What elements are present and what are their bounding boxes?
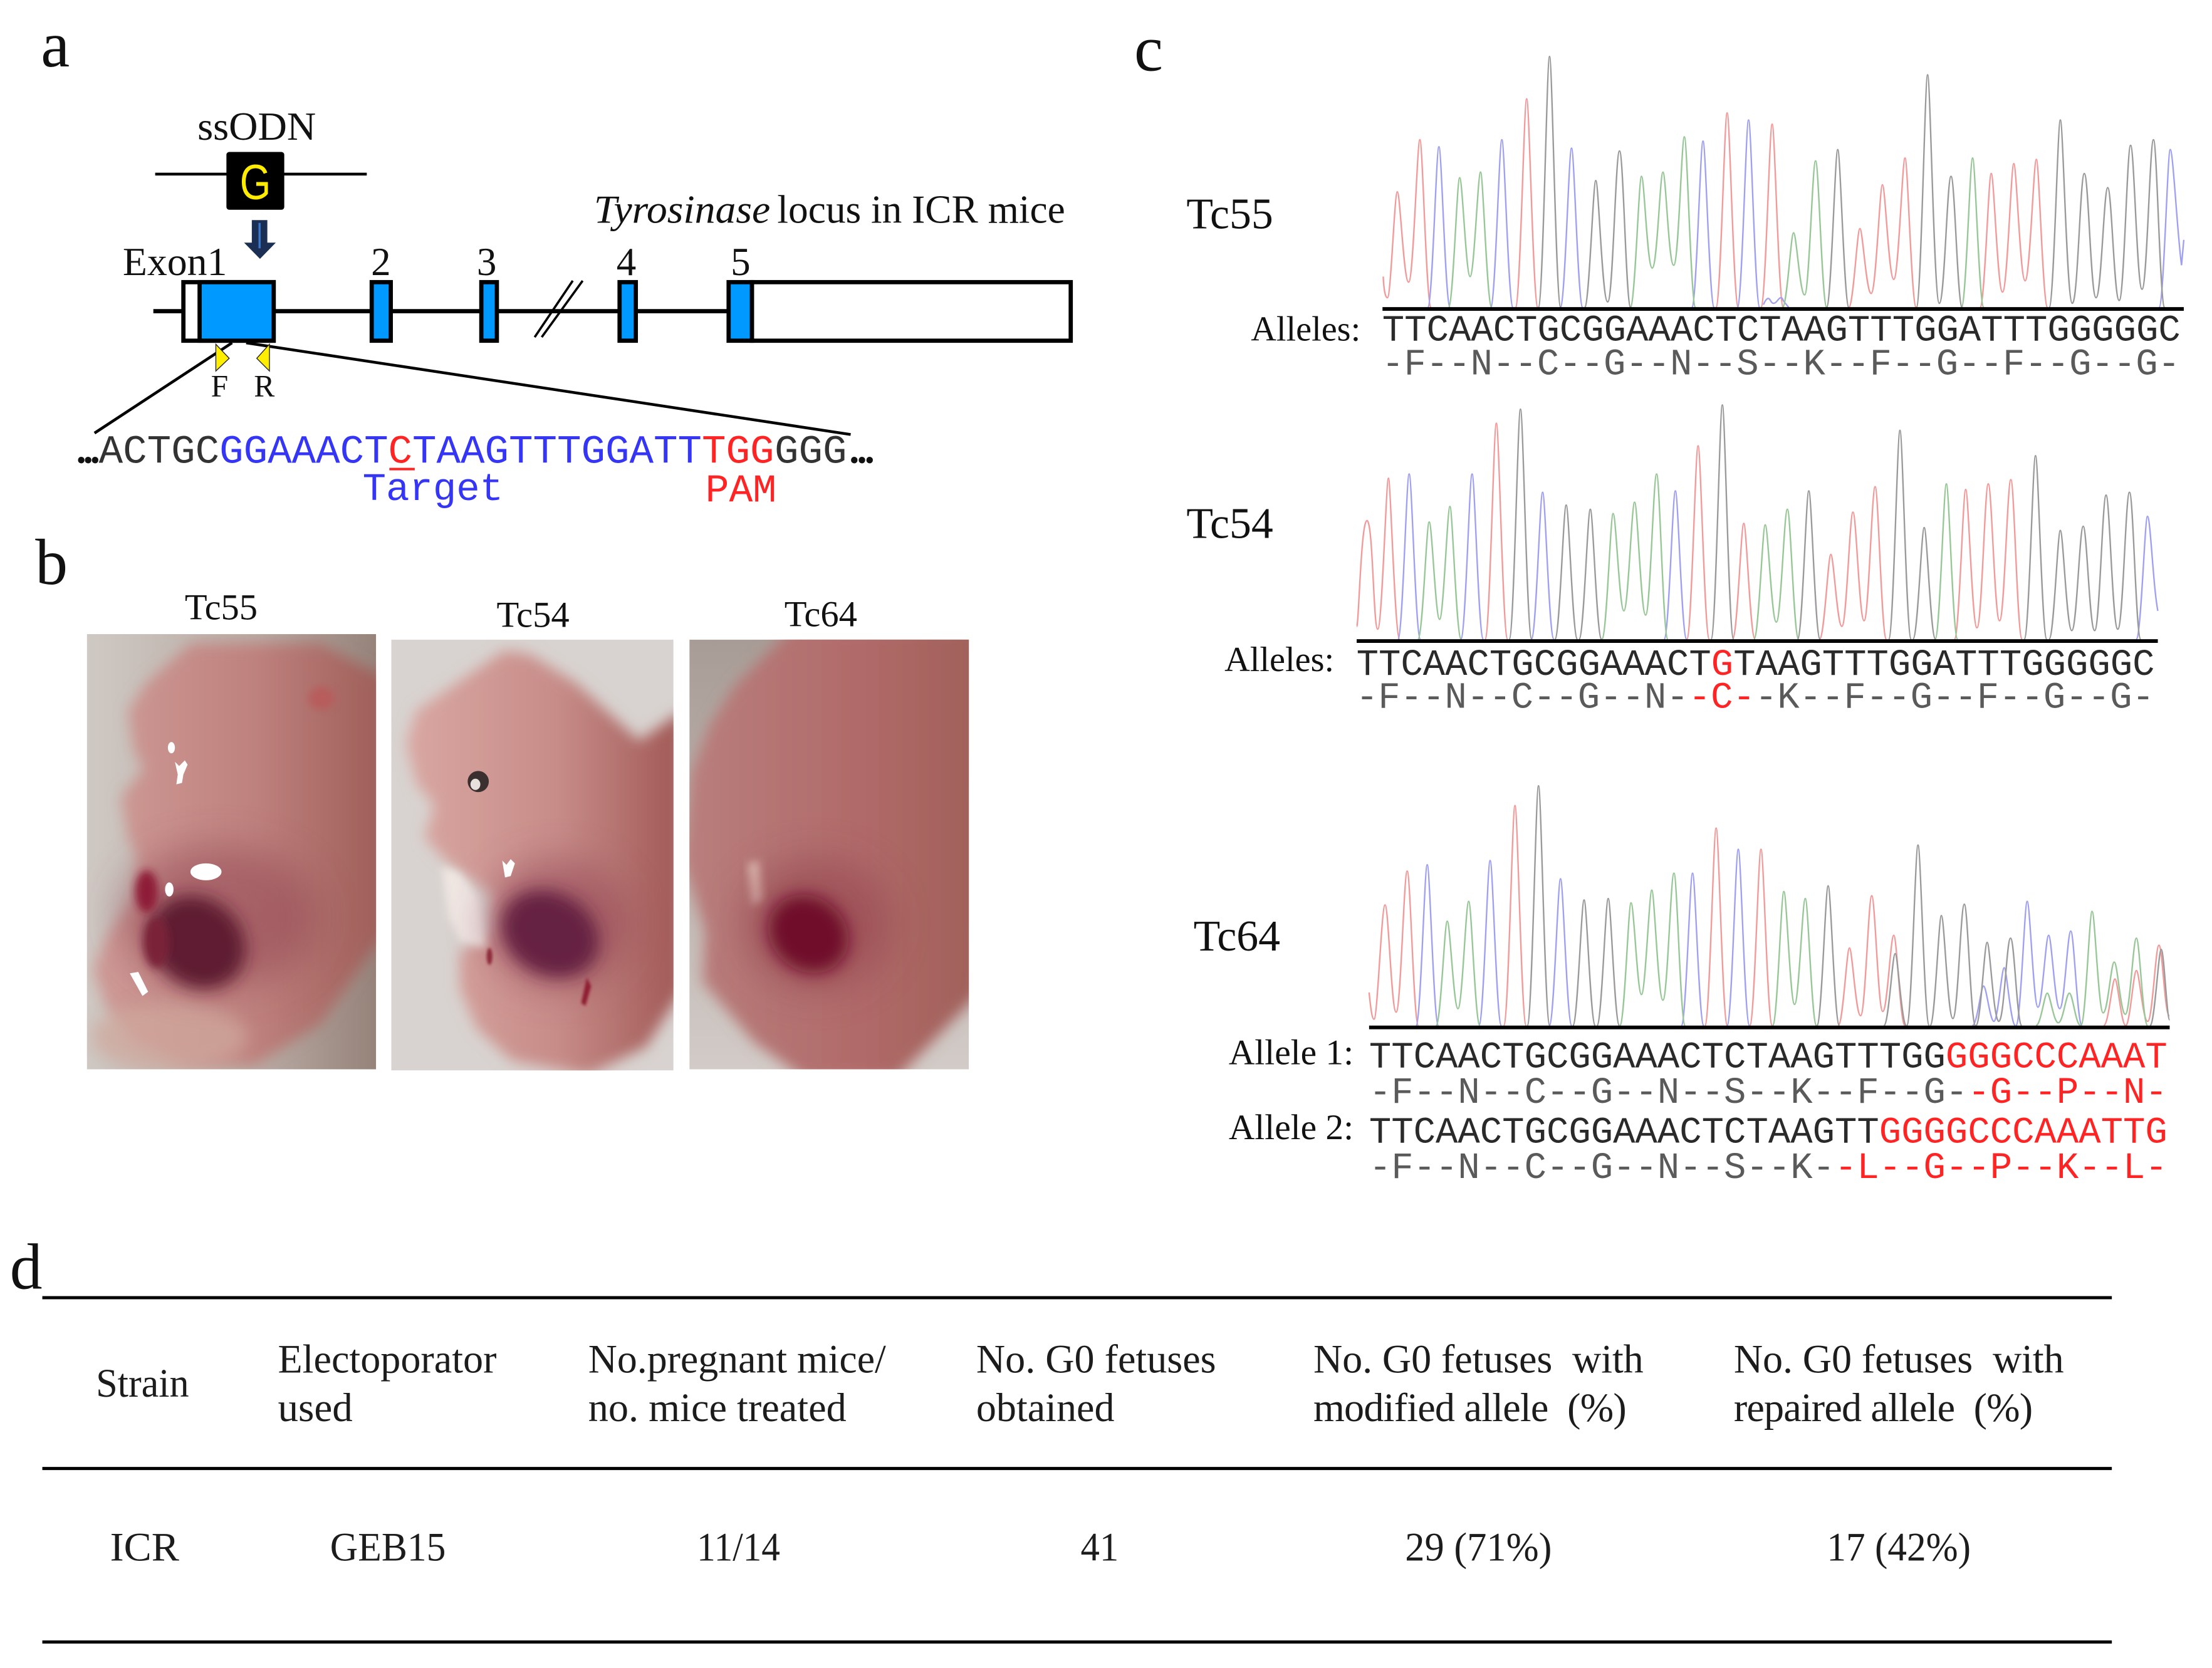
table header row: No. G0 fetuses [976,1337,1216,1382]
primers F and R: F [211,369,228,404]
exon labels: 3 [477,240,496,284]
caption Tc55: Tc55 [185,586,258,627]
table header row: No.pregnant mice/ [588,1337,886,1382]
baseline Tc64 [1369,1026,2169,1028]
target sequence: TAAGTTTGGATT [412,430,702,475]
zoom lines to sequence [95,343,851,434]
table header row [96,1337,2064,1430]
exon labels: 5 [731,240,751,284]
photo Tc64 [689,639,969,1069]
label Tc55: Tc55 [1186,190,1273,239]
target sequence: ... [76,427,100,471]
PAM label: PAM [706,469,776,513]
target sequence: ... [849,427,875,471]
protein sequence allele 2: -F--N--C--G--N--S--K--L--G--P--K--L- [1369,1147,2168,1189]
panel c: sequencing chromatograms [1134,14,2184,1189]
table data row: 17 (42%) [1827,1525,1971,1570]
ssODN label: ssODN [197,105,316,149]
chromatogram Tc54 [1357,405,2158,639]
panel label d: d [10,1231,43,1303]
DNA sequence Tc54 with mutated G: TTCAACTGCGGAAACTGTAAGTTTGGATTTGGGGGC [1357,644,2155,686]
caption Tc54: Tc54 [496,595,570,635]
table data row: 29 (71%) [1405,1525,1552,1570]
protein sequence allele 1: -F--N--C--G--N--S--K--F--G--G--P--N- [1369,1072,2168,1114]
arrow: ssODN to exon 1 [244,220,276,259]
table data row: GEB15 [330,1525,446,1570]
table header row: modified allele (%) [1313,1385,1627,1430]
baseline Tc55 [1382,308,2184,310]
panel label c: c [1134,14,1163,85]
ssODN donor strand with G base: G [240,154,271,209]
primers F and R [211,344,274,404]
locus title: Tyrosinase [594,188,770,232]
table header row: used [278,1385,353,1430]
Target label: Target [363,467,503,512]
table header row: No. G0 fetuses with [1313,1337,1644,1382]
photo Tc54 [392,640,683,1075]
label Alleles Tc55: Alleles: [1251,310,1360,349]
table header row: No. G0 fetuses with [1734,1337,2064,1382]
chromatogram Tc55 [1383,56,2184,308]
DNA sequence allele 2: TTCAACTGCGGAAACTCTAAGTTGGGGCCCAAATTG [1369,1112,2168,1154]
label Alleles Tc54: Alleles: [1224,640,1334,679]
caption Tc64: Tc64 [785,594,857,635]
label Allele 1: Allele 1: [1229,1033,1354,1073]
exon labels: 4 [617,240,636,284]
DNA sequence allele 1: TTCAACTGCGGAAACTCTAAGTTTGGGGGCCCAAAT [1369,1037,2168,1079]
table data row: ICR [110,1525,179,1570]
ssODN donor strand with G base [155,152,367,210]
exon labels: Exon1 [123,240,227,284]
DNA sequence Tc55: TTCAACTGCGGAAACTCTAAGTTTGGATTTGGGGGC [1382,310,2181,352]
target sequence: GGG [775,430,847,475]
target sequence: GGAAACT [219,430,389,475]
protein sequence Tc54: -F--N--C--G--N--C--K--F--G--F--G--G- [1356,677,2154,719]
panel label a: a [41,9,70,81]
protein sequence Tc55: -F--N--C--G--N--S--K--F--G--F--G--G- [1382,344,2180,386]
table data row: 41 [1080,1525,1119,1570]
label Allele 2: Allele 2: [1229,1108,1354,1147]
target sequence: C [389,430,412,475]
table header row: obtained [976,1385,1115,1430]
panel label b: b [35,527,68,598]
panel b: fetus photographs [35,527,981,1079]
chromatogram Tc64 [1369,786,2169,1026]
target sequence: ACTGC [99,430,219,475]
target sequence: TGG [702,430,775,475]
primers F and R: R [254,369,274,404]
gene structure with exons [154,281,1071,341]
table header row: Strain [96,1361,189,1405]
locus title: locus in ICR mice [777,188,1065,232]
table header row: repaired allele (%) [1734,1385,2033,1430]
baseline Tc54 [1357,640,2158,642]
exon labels: 2 [371,240,391,284]
table header row: Electoporator [278,1337,496,1382]
table rules [43,1298,2112,1642]
exon labels [123,240,751,284]
panel d: results table [10,1231,2112,1642]
label Tc64: Tc64 [1194,912,1280,961]
table data row [110,1525,1971,1570]
label Tc54: Tc54 [1186,500,1273,548]
photo Tc55 [87,634,383,1071]
underline of mutated base [389,469,415,470]
panel a: Tyrosinase locus schematic [41,9,1071,513]
table header row: no. mice treated [588,1385,847,1430]
table data row: 11/14 [697,1525,780,1570]
